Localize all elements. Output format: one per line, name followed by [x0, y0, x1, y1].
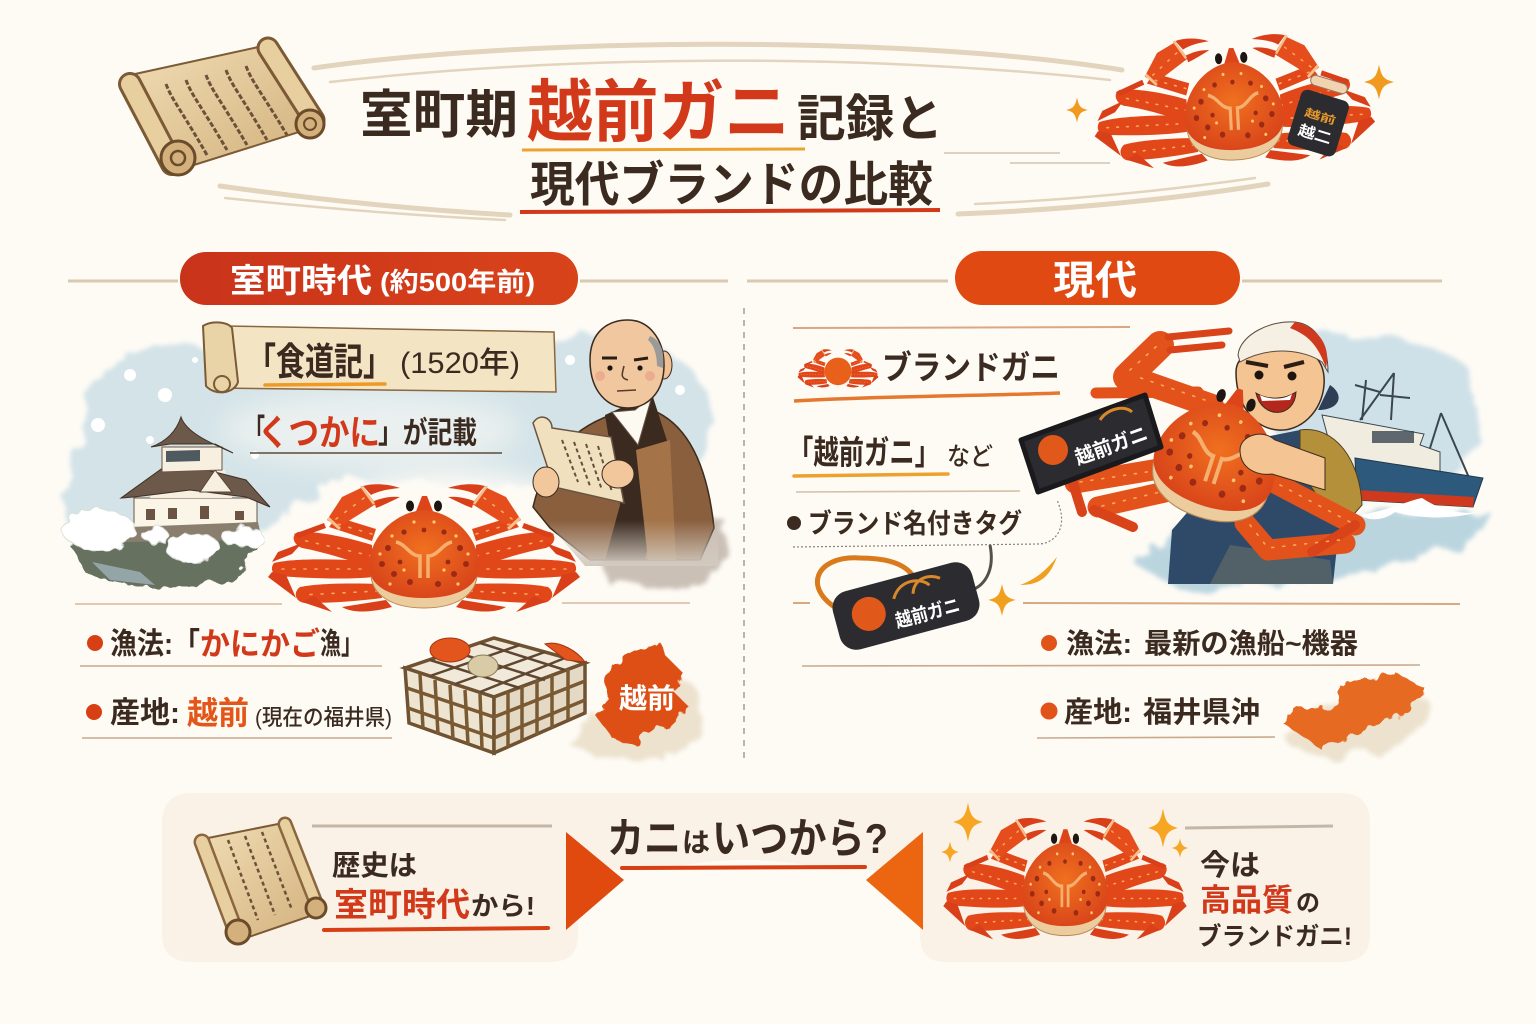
history text: から!	[471, 891, 535, 921]
illustration: fisherman with crab and boat	[1021, 322, 1495, 590]
tag on title crab: 越二	[1296, 122, 1333, 148]
question heading: は	[682, 828, 710, 858]
fishing boat	[1322, 373, 1483, 507]
illustration: crab pot	[405, 638, 585, 753]
watercolor snow background	[65, 336, 710, 588]
fishing method: かにかご	[200, 626, 320, 662]
icon: title scroll	[130, 44, 324, 175]
brand crab heading	[794, 349, 1060, 401]
history scroll	[202, 822, 326, 944]
title line one	[360, 75, 943, 151]
fishing method: 最新の漁船~機器	[1144, 628, 1358, 659]
title line one: 室町期	[360, 87, 518, 145]
production area: 産地:	[110, 697, 180, 730]
Echizen crab note: など	[947, 443, 993, 471]
question heading: いつから?	[712, 815, 888, 862]
panel: Muromachi	[63, 320, 728, 763]
map: Fukui coast	[1282, 672, 1429, 758]
title rules	[220, 44, 1268, 220]
fisherman head	[1236, 345, 1324, 430]
map: Echizen	[570, 642, 704, 763]
fishing method: 漁法:	[1066, 628, 1132, 659]
scroll banner	[203, 322, 556, 392]
arrow: left-pointing	[866, 832, 923, 930]
fisherman body	[1168, 430, 1342, 584]
kutsukani note: 「	[245, 413, 265, 450]
title line one: 越前ガニ	[527, 75, 790, 151]
production area: 福井県沖	[1143, 696, 1260, 729]
modern text: 今は	[1200, 849, 1260, 882]
fishing method: 漁」	[320, 628, 362, 661]
history text: 歴史は	[332, 850, 417, 881]
production area: 越前	[187, 695, 249, 731]
history text: 室町時代	[334, 886, 470, 923]
sparkling crab	[941, 802, 1188, 939]
title line one: 記録と	[797, 91, 943, 147]
left section header: (約500年前)	[380, 267, 535, 297]
fist and forearm	[1240, 434, 1325, 490]
right section header: 現代	[1053, 259, 1137, 303]
illustration: monk with scroll	[533, 320, 728, 590]
summary band	[162, 793, 1370, 980]
illustration: crab	[268, 484, 580, 612]
brand tag on crab	[1021, 395, 1161, 492]
kutsukani note: くつかに	[258, 412, 380, 453]
map: Echizen: 越前	[619, 683, 675, 714]
production area: 産地:	[1064, 696, 1132, 729]
arrow: right-pointing	[566, 832, 624, 930]
Echizen crab note	[788, 434, 1020, 492]
brand tag on crab: 越前ガニ	[1072, 422, 1151, 470]
production area	[82, 695, 392, 738]
rules beside crab	[75, 603, 690, 604]
modern text: 高品質	[1200, 883, 1293, 918]
crab body	[1140, 370, 1298, 536]
modern text	[1185, 826, 1352, 951]
title	[360, 75, 943, 212]
illustration: brand tag	[817, 545, 1057, 654]
modern text: の	[1296, 890, 1320, 917]
right section header	[747, 251, 1442, 305]
fishing method	[80, 626, 382, 666]
fishing method	[802, 628, 1420, 666]
tag note	[787, 500, 1062, 547]
history text	[312, 826, 552, 930]
title line two: 現代ブランドの比較	[530, 159, 933, 212]
sea	[1130, 498, 1495, 590]
tag on title crab: 越前	[1303, 105, 1338, 128]
question heading: カニ	[607, 815, 681, 862]
icon: small crab	[797, 349, 879, 388]
left section header	[68, 252, 728, 305]
brand crab heading: ブランドガニ	[882, 349, 1060, 386]
scroll banner: (1520年)	[400, 347, 520, 380]
modern text: ブランドガニ!	[1197, 922, 1352, 951]
panel: modern	[787, 322, 1495, 758]
illustration: brand tag: 越前ガニ	[893, 594, 962, 633]
icon: title crab with tag	[1066, 29, 1394, 171]
section divider: vertical dashed	[743, 308, 745, 762]
watercolor sky	[1250, 335, 1478, 500]
kutsukani note	[245, 412, 502, 453]
production area	[1037, 696, 1275, 738]
tag note: ブランド名付きタグ	[808, 508, 1022, 539]
production area: (現在の福井県)	[255, 705, 392, 730]
scroll banner: 「食道記」	[247, 342, 392, 384]
tag on title crab	[1286, 73, 1355, 158]
fishing method: 漁法:「	[110, 628, 200, 661]
kutsukani note: 」が記載	[378, 416, 477, 450]
left section header: 室町時代	[230, 262, 372, 299]
crab limbs	[1073, 331, 1355, 552]
question heading	[607, 815, 888, 868]
Echizen crab note: 「越前ガニ」	[788, 434, 940, 471]
illustration: castle in snow	[63, 417, 270, 587]
